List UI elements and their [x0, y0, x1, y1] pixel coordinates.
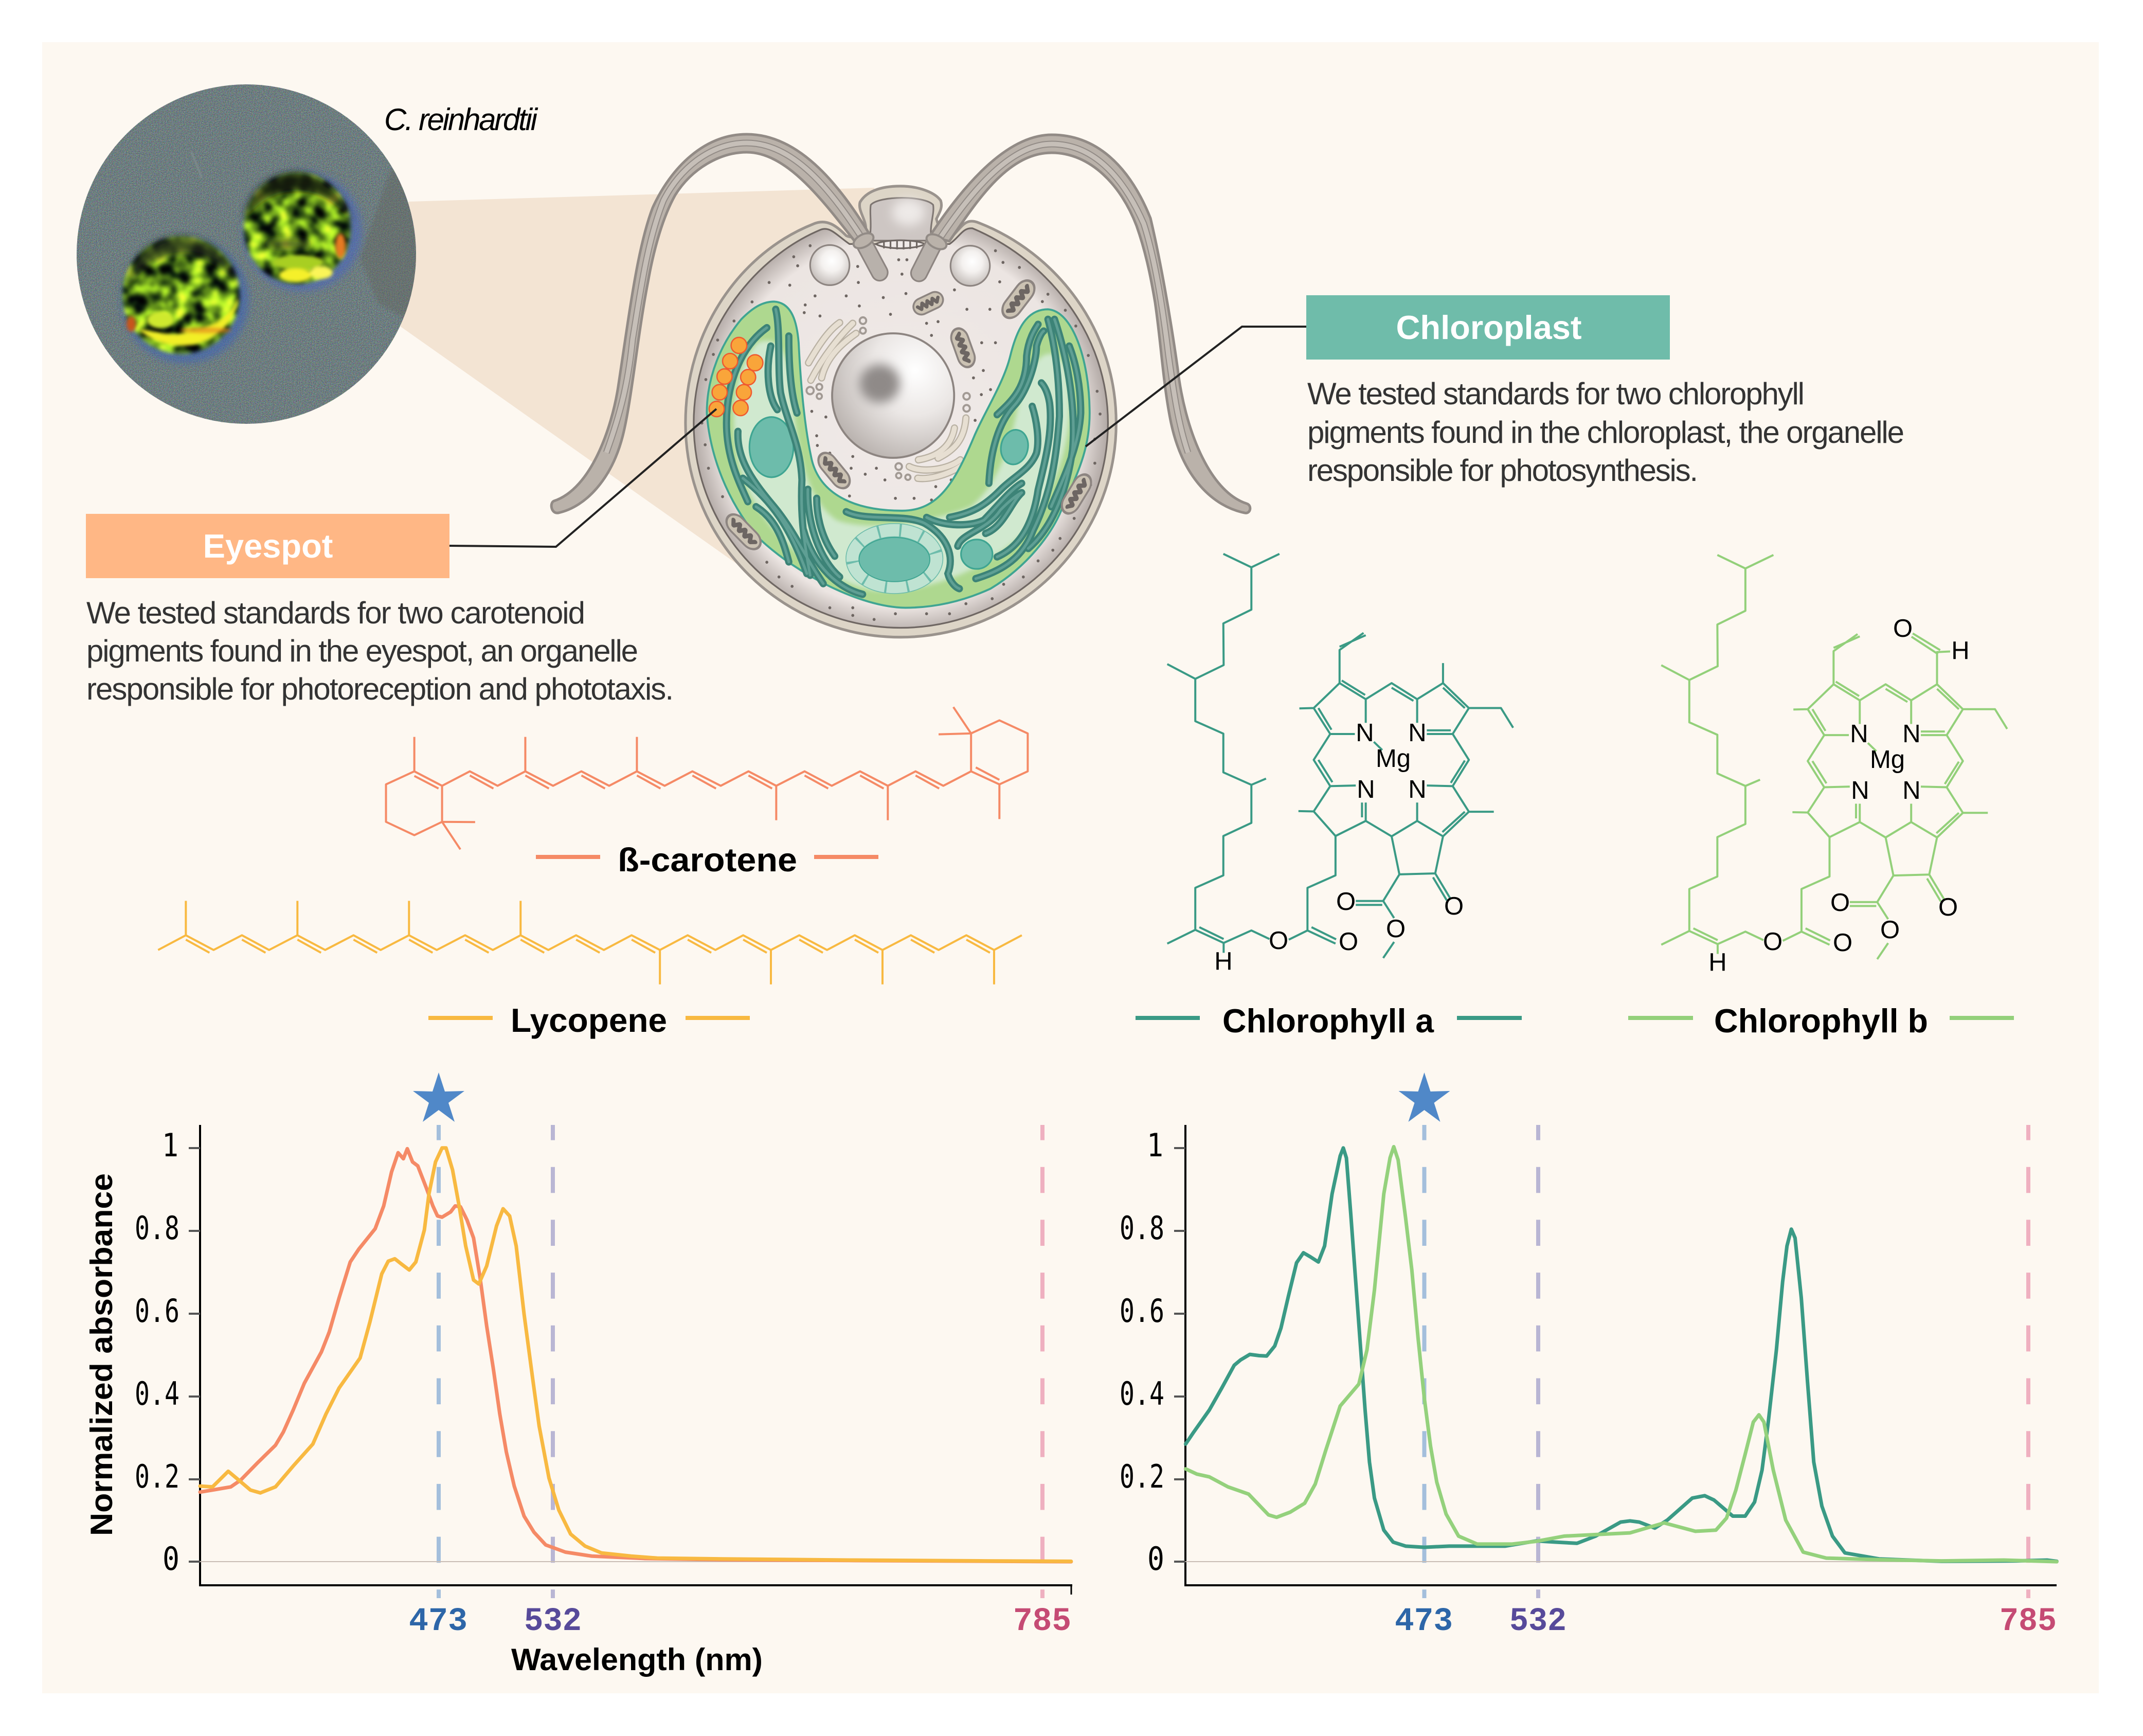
zoom cone from micrograph to cell — [401, 188, 874, 571]
cytoplasm — [694, 228, 1108, 628]
molecule: chlorophyll a: N — [1356, 719, 1374, 747]
x tick label 785: 785 — [1013, 1603, 1071, 1640]
x tick label 532: 532 — [524, 1603, 582, 1640]
eyespot description: pigments found in the eyespot, an organelle — [86, 634, 638, 668]
cell wall — [686, 186, 1116, 637]
molecule: chlorophyll b: O — [1763, 928, 1782, 956]
chloroplast heading: Chloroplast — [1396, 309, 1582, 346]
chloroplast description: responsible for photosynthesis. — [1307, 453, 1698, 488]
laser line 532 nm — [551, 1125, 555, 1598]
axes and ticks — [1174, 1125, 2057, 1586]
star marker — [413, 1072, 464, 1122]
label: beta-carotene — [536, 841, 878, 879]
laser line 473 nm — [1422, 1125, 1427, 1598]
cytoplasmic granules — [702, 246, 1100, 619]
label: beta-carotene: ß-carotene — [618, 841, 797, 879]
starch bodies — [749, 417, 1031, 569]
molecule: chlorophyll b: H — [1951, 637, 1970, 665]
left flagellum — [551, 134, 876, 513]
curve: lycopene — [200, 1148, 1071, 1561]
axes and ticks — [189, 1125, 1072, 1595]
chloroplast connector line — [1086, 327, 1306, 446]
molecule: chlorophyll b — [1661, 555, 2007, 976]
x tick label 473: 473 — [409, 1603, 467, 1640]
molecule: chlorophyll b: N — [1850, 720, 1868, 748]
y tick labels: 1 — [162, 1126, 178, 1164]
molecule: chlorophyll b: O — [1833, 929, 1852, 957]
x tick label 785: 785 — [2000, 1603, 2057, 1640]
label: lycopene — [428, 1001, 750, 1039]
eyespot description: We tested standards for two carotenoid — [86, 596, 585, 630]
label: chlorophyll a — [1136, 1002, 1522, 1040]
molecule: chlorophyll b: O — [1893, 615, 1913, 642]
chloroplast description — [1307, 377, 1904, 488]
chloroplast description: We tested standards for two chlorophyll — [1307, 377, 1805, 411]
molecule: chlorophyll a: O — [1386, 915, 1406, 943]
y tick labels: 0.4 — [135, 1375, 179, 1412]
molecule: beta-carotene — [386, 707, 1028, 849]
cell illustration — [686, 186, 1116, 637]
molecule: lycopene — [158, 901, 1022, 985]
chloroplast — [707, 301, 1090, 608]
molecule: chlorophyll a: O — [1444, 892, 1464, 920]
molecule: chlorophyll a: H — [1214, 947, 1233, 975]
label: chlorophyll b — [1628, 1002, 2014, 1040]
star marker — [1399, 1072, 1450, 1122]
molecule: chlorophyll a: O — [1336, 888, 1356, 916]
pyrenoid — [853, 530, 937, 587]
y tick labels — [135, 1126, 179, 1578]
eyespot description — [86, 596, 674, 706]
y tick labels: 0.2 — [1120, 1458, 1164, 1495]
molecule: chlorophyll a: O — [1339, 928, 1358, 956]
micrograph of C. reinhardtii cells — [77, 84, 427, 424]
laser line 473 nm — [437, 1125, 441, 1598]
curve: chlorophyll b — [1185, 1147, 2057, 1562]
molecule: chlorophyll b: N — [1902, 720, 1921, 748]
basal apparatus striations — [876, 240, 925, 249]
eyespot heading — [86, 514, 449, 578]
apical papilla — [869, 198, 933, 241]
curve: beta-carotene — [200, 1149, 1071, 1562]
laser line 785 nm — [2026, 1125, 2030, 1598]
x axis title: Wavelength (nm) — [511, 1642, 763, 1677]
label: chlorophyll b: Chlorophyll b — [1714, 1002, 1928, 1040]
molecule: chlorophyll a — [1167, 554, 1513, 975]
curve: chlorophyll a — [1185, 1148, 2057, 1561]
molecule: chlorophyll b: Mg — [1870, 746, 1905, 774]
y tick labels: 0.8 — [1120, 1209, 1164, 1247]
chart: chlorophyll absorbance — [1120, 1072, 2057, 1640]
y tick labels: 0.6 — [1120, 1292, 1164, 1330]
molecule: chlorophyll b: N — [1851, 777, 1869, 804]
y tick labels: 1 — [1147, 1126, 1163, 1164]
molecule: chlorophyll a: N — [1408, 776, 1427, 803]
y axis title: Normalized absorbance — [84, 1173, 119, 1536]
chloroplast description: pigments found in the chloroplast, the organelle — [1307, 415, 1904, 450]
contractile vacuoles — [810, 245, 990, 286]
chart: carotenoid absorbance — [84, 1072, 1072, 1677]
y tick labels: 0.4 — [1120, 1375, 1164, 1412]
y tick labels: 0.8 — [135, 1209, 179, 1247]
molecule: chlorophyll b: O — [1830, 889, 1850, 917]
eyespot granules — [709, 337, 763, 417]
species name: C. reinhardtii — [384, 102, 538, 137]
y tick labels: 0 — [1147, 1540, 1164, 1578]
eyespot description: responsible for photoreception and phototaxis. — [86, 672, 674, 706]
eyespot connector line — [449, 409, 716, 547]
nucleus — [832, 333, 954, 458]
molecule: chlorophyll b: O — [1938, 893, 1958, 921]
mitochondria — [723, 277, 1095, 553]
right flagellum — [924, 135, 1250, 513]
molecule: chlorophyll a: O — [1269, 927, 1288, 955]
x tick label 473: 473 — [1395, 1603, 1453, 1640]
basal bodies — [862, 241, 935, 273]
y tick labels: 0.6 — [135, 1292, 179, 1330]
y tick labels: 0.2 — [135, 1458, 179, 1495]
molecule: chlorophyll b: O — [1880, 916, 1900, 944]
molecule: chlorophyll a: Mg — [1376, 745, 1411, 773]
eyespot heading: Eyespot — [203, 527, 333, 565]
molecule: chlorophyll a: N — [1357, 776, 1375, 803]
molecule: chlorophyll b: H — [1708, 948, 1727, 976]
molecule: chlorophyll b: N — [1902, 777, 1921, 804]
y tick labels — [1120, 1126, 1164, 1578]
x tick label 532: 532 — [1509, 1603, 1566, 1640]
chloroplast heading — [1306, 295, 1670, 360]
golgi apparatus — [806, 317, 970, 480]
laser line 785 nm — [1040, 1125, 1045, 1598]
label: chlorophyll a: Chlorophyll a — [1222, 1002, 1434, 1040]
molecule: chlorophyll a: N — [1408, 719, 1427, 747]
thylakoid membranes — [727, 309, 1080, 594]
y tick labels: 0 — [163, 1540, 179, 1578]
label: lycopene: Lycopene — [511, 1001, 667, 1039]
laser line 532 nm — [1536, 1125, 1540, 1598]
